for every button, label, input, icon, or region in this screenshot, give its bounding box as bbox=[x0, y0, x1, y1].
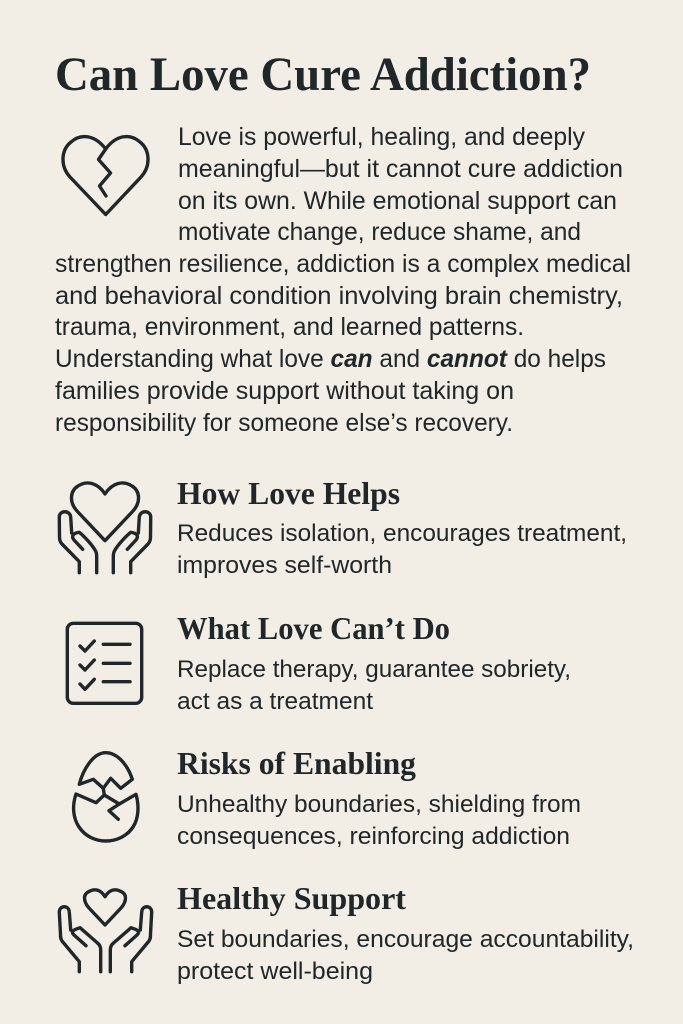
intro paragraph bbox=[55, 123, 631, 437]
intro paragraph: strengthen resilience, addiction is a complex medical bbox=[55, 250, 631, 278]
section: How Love Helps: How Love Helps bbox=[177, 476, 400, 511]
section: How Love Helps bbox=[177, 476, 627, 579]
section: Healthy Support bbox=[177, 881, 634, 985]
icon: checklist bbox=[67, 623, 142, 703]
intro paragraph: trauma, environment, and learned patterns. bbox=[55, 313, 524, 341]
section: How Love Helps: improves self-worth bbox=[177, 552, 392, 579]
intro paragraph: meaningful—but it cannot cure addiction bbox=[178, 155, 623, 183]
section: What Love Can't Do: What Love Can’t Do bbox=[177, 611, 450, 646]
section: Risks of Enabling: consequences, reinforcing addiction bbox=[177, 823, 570, 850]
title: Can Love Cure Addiction? bbox=[55, 48, 591, 101]
icon: hands holding heart bbox=[59, 483, 151, 573]
intro paragraph: on its own. While emotional support can bbox=[178, 187, 617, 215]
icon: cracked egg bbox=[74, 753, 138, 841]
section: Healthy Support: Healthy Support bbox=[177, 881, 407, 916]
icon: hands with small heart bbox=[59, 890, 152, 972]
section: Healthy Support: protect well-being bbox=[177, 958, 373, 985]
section: Risks of Enabling: Risks of Enabling bbox=[177, 746, 416, 781]
section: What Love Can't Do bbox=[177, 611, 571, 715]
intro paragraph: responsibility for someone else’s recovery. bbox=[55, 409, 513, 437]
section: Risks of Enabling bbox=[177, 746, 581, 850]
intro paragraph: families provide support without taking on bbox=[55, 377, 514, 405]
intro paragraph: Understanding what love can and cannot do helps bbox=[55, 345, 606, 373]
intro paragraph: and behavioral condition involving brain chemistry, bbox=[55, 282, 623, 310]
intro paragraph: Love is powerful, healing, and deeply bbox=[178, 123, 585, 151]
icon: broken heart bbox=[63, 137, 148, 214]
section: Risks of Enabling: Unhealthy boundaries, shielding from bbox=[177, 791, 581, 818]
section: What Love Can't Do: Replace therapy, guarantee sobriety, bbox=[177, 656, 571, 683]
section: Healthy Support: Set boundaries, encourage accountability, bbox=[177, 926, 634, 953]
section: What Love Can't Do: act as a treatment bbox=[177, 688, 373, 715]
intro paragraph: motivate change, reduce shame, and bbox=[178, 218, 581, 246]
section: How Love Helps: Reduces isolation, encourages treatment, bbox=[177, 520, 627, 547]
